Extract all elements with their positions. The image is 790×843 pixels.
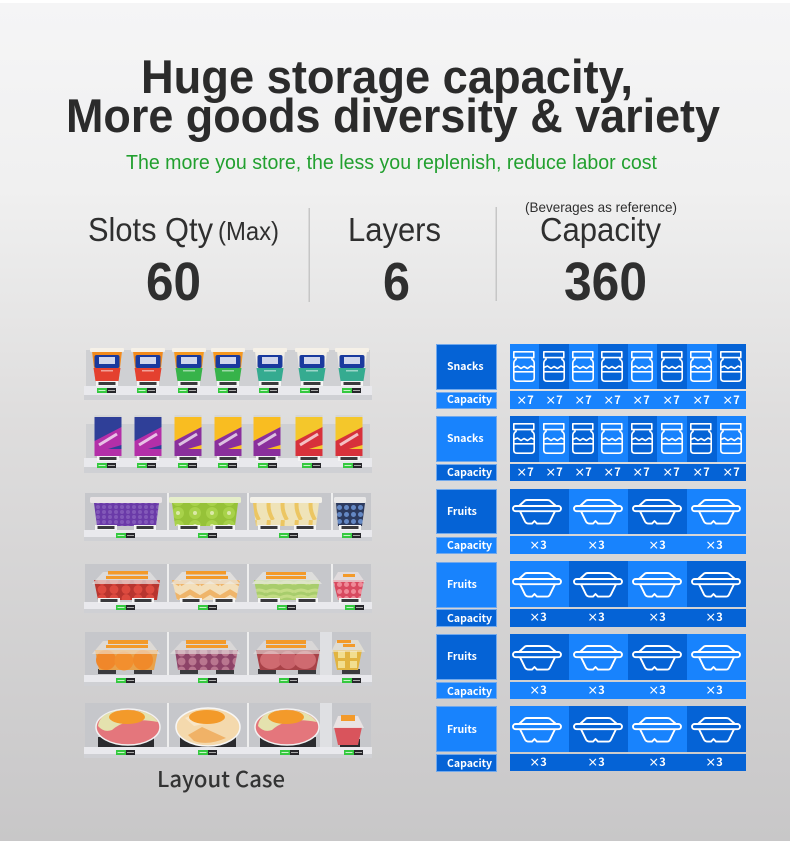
- row 1: snacks: ×7: [722, 392, 740, 408]
- row 6: fruits: Capacity: [447, 756, 492, 771]
- row 6: fruits: ×3: [705, 754, 723, 770]
- stat: slots quantity: Slots Qty: [88, 211, 213, 248]
- row 1: snacks: ×7: [516, 392, 534, 408]
- row 4: fruits: ×3: [705, 609, 723, 625]
- row 5: fruits: Fruits: [447, 649, 477, 664]
- stat: capacity: [525, 199, 677, 312]
- shelf 6: round fruit bowls: [84, 703, 372, 758]
- row 1: snacks: Capacity: [447, 392, 492, 407]
- row 2: snacks: Capacity: [447, 465, 492, 480]
- row 5: fruits: ×3: [587, 682, 605, 698]
- row 1: snacks: ×7: [603, 392, 621, 408]
- row 3: fruits: ×3: [705, 537, 723, 553]
- subtitle: The more you store, the less you replenish, reduce labor cost: [126, 152, 657, 174]
- stat: layers: Layers: [348, 211, 441, 248]
- row 2: snacks: ×7: [632, 464, 650, 480]
- row 3: fruits: [436, 489, 746, 554]
- row 6: fruits: ×3: [587, 754, 605, 770]
- shelf 4: clamshell trays: [84, 564, 372, 613]
- row 5: fruits: ×3: [648, 682, 666, 698]
- row 2: snacks: ×7: [662, 464, 680, 480]
- row 6: fruits: ×3: [529, 754, 547, 770]
- row 2: snacks: [436, 416, 746, 481]
- row 4: fruits: ×3: [648, 609, 666, 625]
- title: [66, 50, 720, 142]
- title: More goods diversity & variety: [66, 89, 720, 142]
- title: Huge storage capacity,: [141, 50, 633, 103]
- shelf 3: lidded fruit trays: [84, 493, 372, 541]
- row 2: snacks: ×7: [603, 464, 621, 480]
- row 5: fruits: [436, 634, 746, 699]
- row 4: fruits: [436, 561, 746, 627]
- row 3: fruits: Capacity: [447, 538, 492, 553]
- row 2: snacks: ×7: [545, 464, 563, 480]
- row 4: fruits: Capacity: [447, 611, 492, 626]
- row 5: fruits: ×3: [529, 682, 547, 698]
- row 4: fruits: ×3: [529, 609, 547, 625]
- row 5: fruits: ×3: [705, 682, 723, 698]
- row 6: fruits: ×3: [648, 754, 666, 770]
- layout case caption: Layout Case: [157, 762, 285, 794]
- stat: capacity: (Beverages as reference): [525, 199, 677, 215]
- stat: capacity: 360: [564, 252, 647, 312]
- stat: slots quantity: (Max): [218, 216, 279, 246]
- stat: slots quantity: 60: [146, 252, 201, 312]
- row 2: snacks: ×7: [722, 464, 740, 480]
- row 1: snacks: [436, 344, 746, 409]
- row 2: snacks: ×7: [692, 464, 710, 480]
- row 1: snacks: ×7: [632, 392, 650, 408]
- row 5: fruits: Capacity: [447, 684, 492, 699]
- row 3: fruits: ×3: [529, 537, 547, 553]
- panel: layout case shelves: [84, 348, 372, 758]
- stat: layers: 6: [383, 252, 410, 312]
- row 2: snacks: ×7: [574, 464, 592, 480]
- row 1: snacks: ×7: [692, 392, 710, 408]
- stat: slots quantity: [88, 211, 279, 312]
- row 6: fruits: Fruits: [447, 722, 477, 737]
- row 1: snacks: Snacks: [447, 359, 484, 374]
- row 3: fruits: Fruits: [447, 504, 477, 519]
- row 3: fruits: ×3: [648, 537, 666, 553]
- panel: capacity diagram: [436, 344, 746, 772]
- row 3: fruits: ×3: [587, 537, 605, 553]
- shelf 2: cans: [84, 415, 372, 473]
- stat: layers: [348, 211, 441, 312]
- stat: capacity: Capacity: [540, 211, 661, 248]
- row 4: fruits: Fruits: [447, 577, 477, 592]
- row 1: snacks: ×7: [662, 392, 680, 408]
- row 6: fruits: [436, 706, 746, 772]
- shelf 5: clamshell fruit boxes: [84, 632, 372, 686]
- shelf 1: fruit cups: [84, 348, 372, 400]
- row 4: fruits: ×3: [587, 609, 605, 625]
- row 1: snacks: ×7: [545, 392, 563, 408]
- row 2: snacks: ×7: [516, 464, 534, 480]
- row 1: snacks: ×7: [574, 392, 592, 408]
- row 2: snacks: Snacks: [447, 431, 484, 446]
